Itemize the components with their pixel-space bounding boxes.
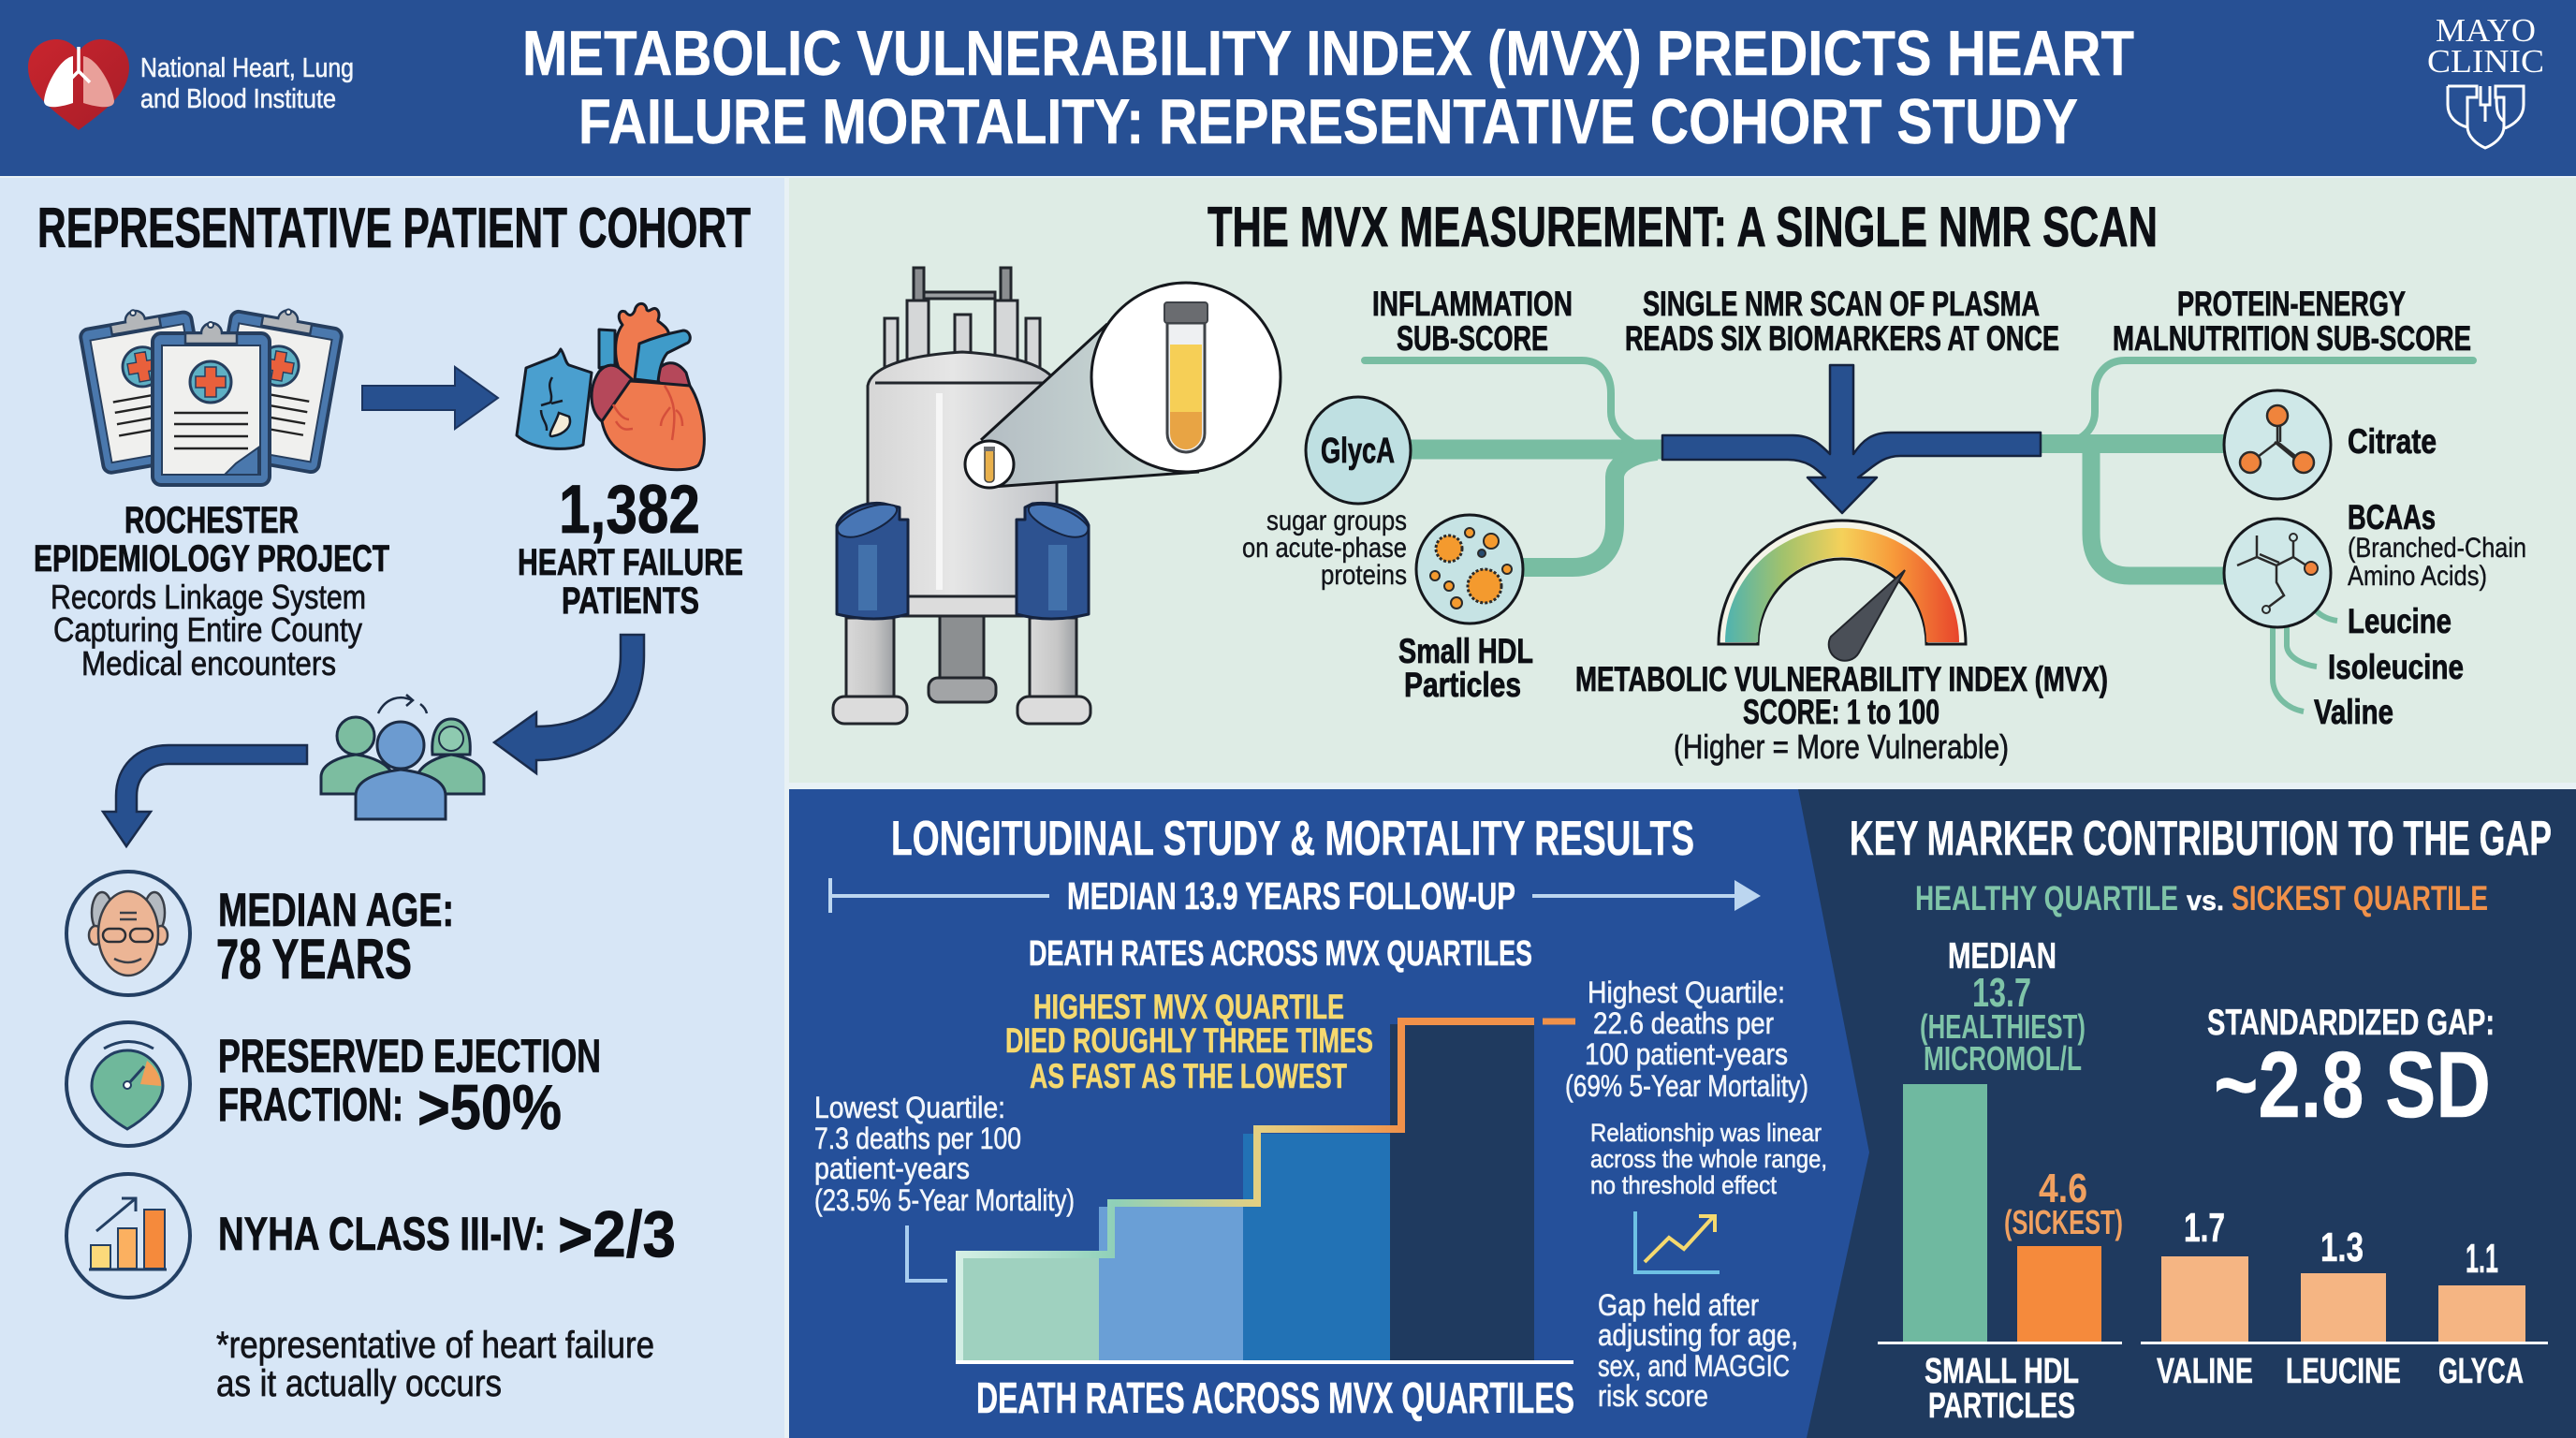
- chart: standardized gap bars: 1.7: [2184, 1205, 2225, 1251]
- chart: standardized gap bars: [2141, 1205, 2548, 1391]
- text: linear relationship: across the whole range,: [1590, 1145, 1827, 1173]
- node: citrate: [2224, 390, 2331, 499]
- text: Rochester Epidemiology Project: EPIDEMIOLOGY PROJECT: [34, 538, 389, 580]
- arrow: group to stats: [103, 745, 307, 846]
- text: MVX score: METABOLIC VULNERABILITY INDEX (MVX): [1575, 660, 2108, 698]
- callout: three times as fast: AS FAST AS THE LOWEST: [1030, 1057, 1347, 1095]
- node: GlycA: [1306, 397, 1411, 504]
- text: lowest quartile: [814, 1091, 1075, 1217]
- label: small HDL particles: Small HDL: [1398, 632, 1533, 670]
- label: single NMR scan: READS SIX BIOMARKERS AT ONCE: [1625, 319, 2059, 358]
- arrow: patients to group: [494, 635, 644, 773]
- text: lowest quartile: patient-years: [814, 1152, 970, 1185]
- connector: lowest quartile: [907, 1225, 947, 1281]
- icon: trend line: [1635, 1211, 1720, 1272]
- panel: longitudinal study and mortality: [789, 789, 1884, 1438]
- label: median healthiest value: MICROMOL/L: [1924, 1039, 2082, 1078]
- stat: standardized gap: [2207, 1003, 2495, 1137]
- chart: quartile step bars: [956, 1021, 1575, 1364]
- stat: standardized gap: ~2.8 SD: [2214, 1033, 2491, 1137]
- label: valine: Valine: [2314, 693, 2393, 731]
- panel: key marker contribution: [1798, 789, 2576, 1438]
- header band: [0, 0, 2576, 176]
- label: inflammation sub-score: INFLAMMATION: [1372, 285, 1573, 323]
- text: GlycA description: [1242, 506, 1407, 591]
- logo: Mayo Clinic: [2427, 12, 2544, 148]
- label: BCAAs: (Branched-Chain: [2348, 533, 2526, 564]
- stat: 1,382 heart failure patients: [518, 472, 743, 622]
- label: small HDL particles: [1925, 1352, 2079, 1426]
- label: protein-energy malnutrition: PROTEIN-ENERGY: [2177, 285, 2406, 323]
- illustration: magnified plasma tube: [965, 283, 1281, 488]
- callout: three times as fast: [1005, 988, 1373, 1095]
- logo: Mayo Clinic: CLINIC: [2427, 43, 2544, 80]
- text: MVX score: (Higher = More Vulnerable): [1674, 727, 2009, 766]
- stat: preserved ejection fraction: >50%: [417, 1072, 562, 1143]
- title: METABOLIC VULNERABILITY INDEX (MVX) PREDICTS HEART: [522, 18, 2134, 89]
- stat: preserved ejection fraction: PRESERVED EJECTION: [218, 1030, 601, 1082]
- logo: NHLBI heart and lungs: [28, 39, 129, 130]
- stat: 1,382 heart failure patients: HEART FAILURE: [518, 542, 743, 583]
- label: small HDL particles: Particles: [1404, 666, 1521, 704]
- label: small HDL particles: PARTICLES: [1928, 1387, 2075, 1426]
- icon: NYHA bars: [66, 1174, 190, 1298]
- legend: healthy vs sickest: vs.: [2187, 886, 2224, 917]
- label: single NMR scan: [1625, 285, 2059, 358]
- label: isoleucine: Isoleucine: [2328, 648, 2464, 686]
- chart: standardized gap bars: VALINE: [2157, 1352, 2253, 1391]
- stat: median age: 78 YEARS: [216, 928, 412, 990]
- text: highest quartile: 22.6 deaths per: [1593, 1006, 1774, 1040]
- icon: ejection fraction gauge: [66, 1022, 190, 1146]
- logo: Mayo Clinic: MAYO: [2436, 12, 2536, 49]
- label: inflammation sub-score: SUB-SCORE: [1397, 319, 1548, 358]
- chart: standardized gap bars: LEUCINE: [2286, 1352, 2401, 1391]
- title: [522, 18, 2134, 157]
- illustration: NMR machine: [833, 268, 1090, 724]
- icon: patient group: [321, 695, 484, 819]
- text: highest quartile: [1565, 976, 1808, 1103]
- footnote: *representative of heart failure: [216, 1325, 654, 1366]
- text: linear relationship: Relationship was linear: [1590, 1119, 1822, 1147]
- text: highest quartile: (69% 5-Year Mortality): [1565, 1069, 1808, 1103]
- stat: 1,382 heart failure patients: PATIENTS: [562, 580, 699, 622]
- arrow: records to patients: [362, 367, 498, 429]
- logo text: NHLBI: [140, 53, 354, 114]
- text: gap held after adjustment: sex, and MAGGIC: [1598, 1349, 1790, 1383]
- stat: median age: [216, 884, 454, 990]
- stat: NYHA class: >2/3: [558, 1197, 676, 1270]
- label: small HDL particles: SMALL HDL: [1925, 1352, 2079, 1391]
- label: protein-energy malnutrition: [2113, 285, 2471, 358]
- label: median healthiest value: 13.7: [1972, 970, 2031, 1016]
- label: sickest value: [2004, 1166, 2123, 1241]
- label: BCAAs: BCAAs: [2348, 498, 2436, 536]
- text: Rochester Epidemiology Project: Medical encounters: [81, 644, 336, 682]
- text: MVX score: SCORE: 1 to 100: [1743, 693, 1939, 731]
- label: median healthiest value: [1920, 936, 2086, 1078]
- arrow: scan converging to score: [1662, 365, 2041, 513]
- stat: preserved ejection fraction: [218, 1030, 601, 1143]
- icon: older patient: [66, 872, 190, 995]
- text: Rochester Epidemiology Project: ROCHESTER: [124, 500, 299, 541]
- label: BCAAs: [2348, 498, 2526, 592]
- text: linear relationship: no threshold effect: [1590, 1171, 1777, 1199]
- axis label: death rates: DEATH RATES ACROSS MVX QUARTILES: [976, 1373, 1574, 1422]
- heading: longitudinal study: LONGITUDINAL STUDY & MORTALITY RESULTS: [891, 812, 1694, 866]
- callout: three times as fast: DIED ROUGHLY THREE TIMES: [1005, 1021, 1373, 1060]
- callout: three times as fast: HIGHEST MVX QUARTILE: [1033, 988, 1344, 1026]
- stat: preserved ejection fraction: FRACTION:: [218, 1078, 403, 1131]
- text: gap held after adjustment: Gap held after: [1598, 1288, 1759, 1322]
- panel: representative patient cohort: [0, 178, 784, 1438]
- panel: MVX measurement: [789, 178, 2576, 783]
- icon: heart with damaged tissue: [517, 303, 704, 470]
- logo text: NHLBI: and Blood Institute: [140, 84, 336, 114]
- text: linear relationship: [1590, 1119, 1827, 1199]
- connector: protein-energy branch: [2041, 360, 2473, 712]
- connector: inflammation branch: [1365, 360, 1676, 567]
- label: BCAAs: Amino Acids): [2348, 561, 2487, 592]
- text: lowest quartile: 7.3 deaths per 100: [814, 1122, 1021, 1155]
- label: leucine: Leucine: [2348, 602, 2452, 640]
- footnote: as it actually occurs: [216, 1363, 502, 1404]
- chart: small HDL bars: [1878, 1084, 2122, 1344]
- chart: standardized gap bars: 1.1: [2466, 1236, 2498, 1282]
- label: sickest value: 4.6: [2039, 1166, 2087, 1211]
- title: FAILURE MORTALITY: REPRESENTATIVE COHORT STUDY: [578, 86, 2078, 157]
- node: GlycA: GlycA: [1321, 432, 1395, 471]
- stat: 1,382 heart failure patients: 1,382: [559, 472, 700, 548]
- chart: MVX gauge: [1719, 521, 1966, 661]
- text: Rochester Epidemiology Project: Capturing Entire County: [53, 610, 362, 649]
- stat: NYHA class: NYHA CLASS III-IV:: [218, 1208, 546, 1260]
- text: highest quartile: Highest Quartile:: [1588, 976, 1785, 1009]
- legend: healthy vs sickest: HEALTHY QUARTILE: [1915, 879, 2178, 917]
- label: small HDL particles: [1398, 632, 1533, 704]
- heading: measurement: THE MVX MEASUREMENT: A SINGLE NMR SCAN: [1208, 196, 2158, 258]
- node: small HDL particles: [1416, 515, 1523, 624]
- legend: healthy vs sickest: SICKEST QUARTILE: [2232, 879, 2488, 917]
- text: GlycA description: proteins: [1321, 560, 1407, 591]
- text: gap held after adjustment: [1598, 1288, 1798, 1413]
- text: gap held after adjustment: adjusting for age,: [1598, 1318, 1798, 1352]
- node: BCAAs: [2224, 519, 2331, 627]
- text: lowest quartile: Lowest Quartile:: [814, 1091, 1005, 1124]
- text: gap held after adjustment: risk score: [1598, 1379, 1708, 1413]
- footnote: [216, 1325, 654, 1404]
- label: inflammation sub-score: [1372, 285, 1573, 358]
- text: GlycA description: on acute-phase: [1242, 533, 1407, 564]
- heading: cohort: REPRESENTATIVE PATIENT COHORT: [37, 197, 751, 259]
- label: citrate: Citrate: [2348, 422, 2437, 461]
- icon: stacked clipboards: [78, 300, 344, 485]
- text: Rochester Epidemiology Project: [34, 500, 389, 682]
- label: single NMR scan: SINGLE NMR SCAN OF PLASMA: [1643, 285, 2040, 323]
- chart: standardized gap bars: GLYCA: [2438, 1352, 2524, 1391]
- stat: median age: MEDIAN AGE:: [218, 884, 454, 936]
- legend: healthy vs sickest: [1915, 879, 2488, 917]
- arrow: follow-up timeline: MEDIAN 13.9 YEARS FOLLOW-UP: [1067, 874, 1515, 917]
- stat: NYHA class: [218, 1197, 676, 1270]
- chart: standardized gap bars: 1.3: [2320, 1225, 2364, 1270]
- text: Rochester Epidemiology Project: Records Linkage System: [51, 578, 366, 616]
- text: GlycA description: sugar groups: [1266, 506, 1407, 536]
- subheading: death rates: DEATH RATES ACROSS MVX QUARTILES: [1029, 934, 1532, 974]
- label: median healthiest value: (HEALTHIEST): [1920, 1007, 2086, 1046]
- text: lowest quartile: (23.5% 5-Year Mortality): [814, 1183, 1075, 1217]
- label: median healthiest value: MEDIAN: [1948, 936, 2056, 976]
- logo text: NHLBI: National Heart, Lung: [140, 53, 354, 83]
- text: MVX score: [1575, 660, 2108, 766]
- text: highest quartile: 100 patient-years: [1585, 1037, 1788, 1071]
- arrow: follow-up timeline: [830, 874, 1761, 917]
- label: sickest value: (SICKEST): [2004, 1203, 2123, 1241]
